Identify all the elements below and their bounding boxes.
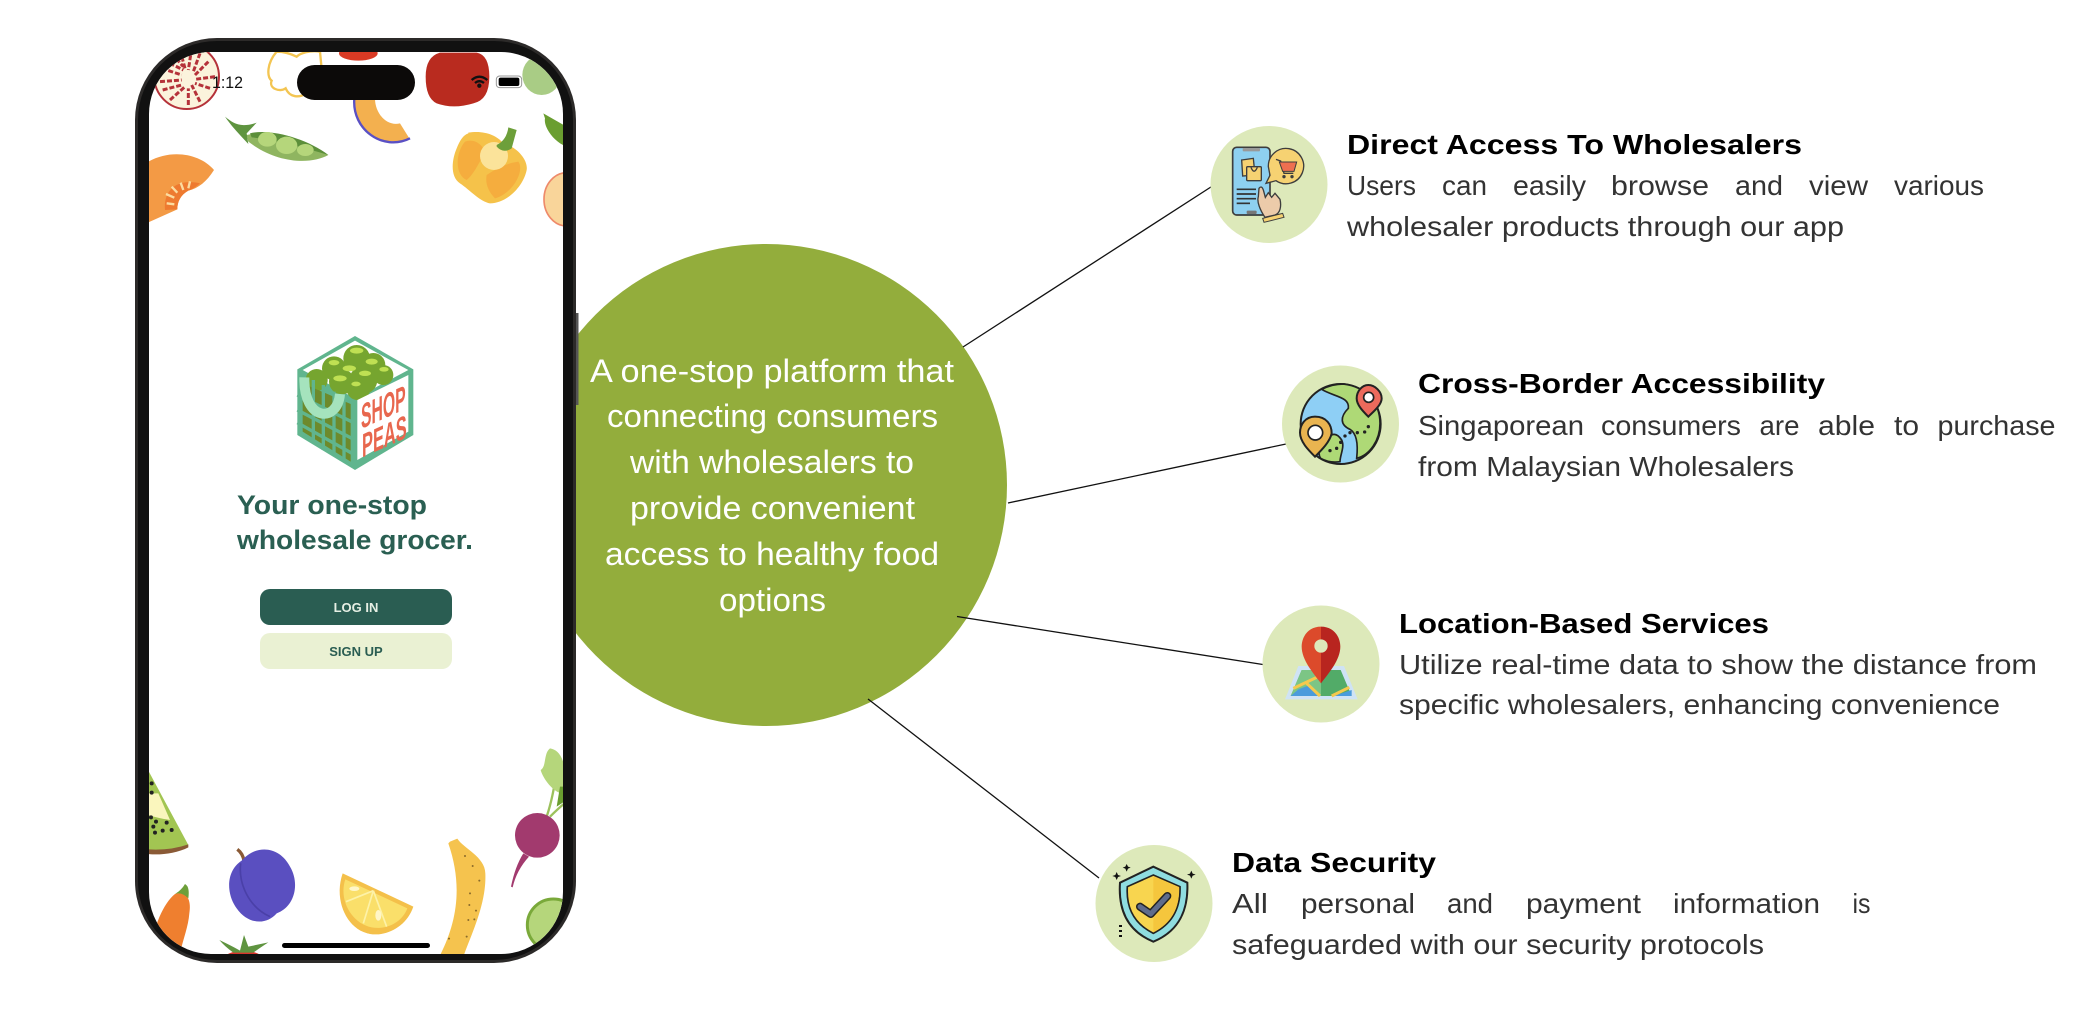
button: log in [260, 589, 452, 625]
icon: lime slice [526, 898, 562, 944]
body text: Singaporean [1418, 410, 1584, 441]
body text: view [1809, 170, 1869, 201]
body text [1232, 888, 1870, 960]
phone heading: Your one-stop [237, 490, 427, 520]
body text: from Malaysian Wholesalers [1418, 451, 1794, 482]
icon: carrot [157, 884, 190, 946]
body text: various [1894, 170, 1984, 201]
icon: red slice [339, 52, 378, 61]
icon: battery [496, 76, 522, 88]
central circle with summary text: with wholesalers to [629, 444, 914, 480]
body text: easily [1513, 170, 1586, 201]
icon: red apple [426, 53, 489, 106]
feature 3: location [1262, 606, 2037, 722]
icon: beetroot [511, 748, 567, 887]
central circle with summary text: options [719, 582, 826, 618]
body text: purchase [1938, 410, 2056, 441]
body text: safeguarded with our security protocols [1232, 929, 1764, 960]
icon: bell pepper [453, 127, 527, 203]
icon: shield [1096, 845, 1212, 962]
central circle with summary text: A one-stop platform that [590, 353, 954, 389]
icon: map pin [1262, 606, 1380, 722]
body text [1418, 410, 2056, 482]
body text: Users [1347, 170, 1416, 201]
home indicator [282, 943, 430, 948]
body text: specific wholesalers, enhancing convenience [1399, 689, 2000, 720]
body text: wholesaler products through our app [1346, 211, 1844, 242]
phone heading: wholesale grocer. [236, 525, 473, 555]
heading: Direct Access To Wholesalers [1347, 129, 1802, 160]
body text: information [1673, 888, 1820, 919]
body text: and [1447, 888, 1493, 919]
icon: strawberry [220, 935, 268, 954]
icon: pea pod [225, 117, 328, 161]
dynamic island [297, 65, 415, 100]
heading: Data Security [1232, 847, 1436, 878]
feature 1: direct access [1210, 126, 1984, 243]
logo: shop peas crate: SHOP [361, 377, 406, 437]
body text: are [1760, 410, 1800, 441]
icon: orange pumpkin wedge [147, 154, 214, 223]
heading: Cross-Border Accessibility [1418, 368, 1825, 399]
button: sign up: SIGN UP [329, 644, 383, 659]
icon: plum [229, 849, 295, 922]
phone mockup [135, 38, 589, 969]
icon: pomegranate [154, 44, 219, 109]
icon: kiwi wedge [148, 771, 188, 854]
body text: Utilize real-time data to show the distance from [1399, 649, 2037, 680]
connector lines [868, 185, 1286, 878]
body text: personal [1301, 888, 1415, 919]
icon: lemon wedge [340, 873, 413, 934]
body text: can [1442, 170, 1487, 201]
body text [1399, 649, 2037, 720]
body text: and [1735, 170, 1783, 201]
logo: shop peas crate: PEAS [362, 408, 407, 465]
body text: able [1818, 410, 1875, 441]
body text [1346, 170, 1984, 242]
body text: payment [1526, 888, 1641, 919]
screen bottom fruits [149, 748, 563, 954]
body text: consumers [1601, 410, 1741, 441]
logo: shop peas crate [297, 336, 413, 470]
feature 2: cross-border [1282, 366, 2056, 482]
central circle with summary text: access to healthy food [605, 536, 939, 572]
central circle with summary text [525, 244, 1007, 726]
phone frame [135, 38, 578, 963]
icon: phone shopping [1210, 126, 1328, 243]
icon: peach slice [543, 172, 563, 226]
body text: is [1852, 888, 1870, 919]
screen top fruits [147, 44, 589, 969]
icon: green fruit [522, 59, 557, 95]
button: sign up [260, 633, 452, 669]
heading: Location-Based Services [1399, 608, 1769, 639]
icon: globe with pins [1282, 366, 1399, 482]
body text: to [1894, 410, 1919, 441]
icon: banana [439, 839, 485, 957]
body text: browse [1611, 170, 1709, 201]
body text: All [1232, 888, 1268, 919]
button: log in: LOG IN [334, 600, 378, 615]
icon: cucumber [543, 113, 563, 145]
central circle with summary text: connecting consumers [607, 398, 938, 434]
status bar: time: 1:12 [212, 73, 243, 92]
feature 4: data security [1096, 845, 1870, 962]
icon: yellow pepper ring [268, 51, 323, 96]
phone heading [236, 490, 473, 555]
central circle with summary text: provide convenient [630, 490, 915, 526]
icon: pumpkin slice [354, 98, 410, 142]
icon: wifi [472, 77, 487, 87]
